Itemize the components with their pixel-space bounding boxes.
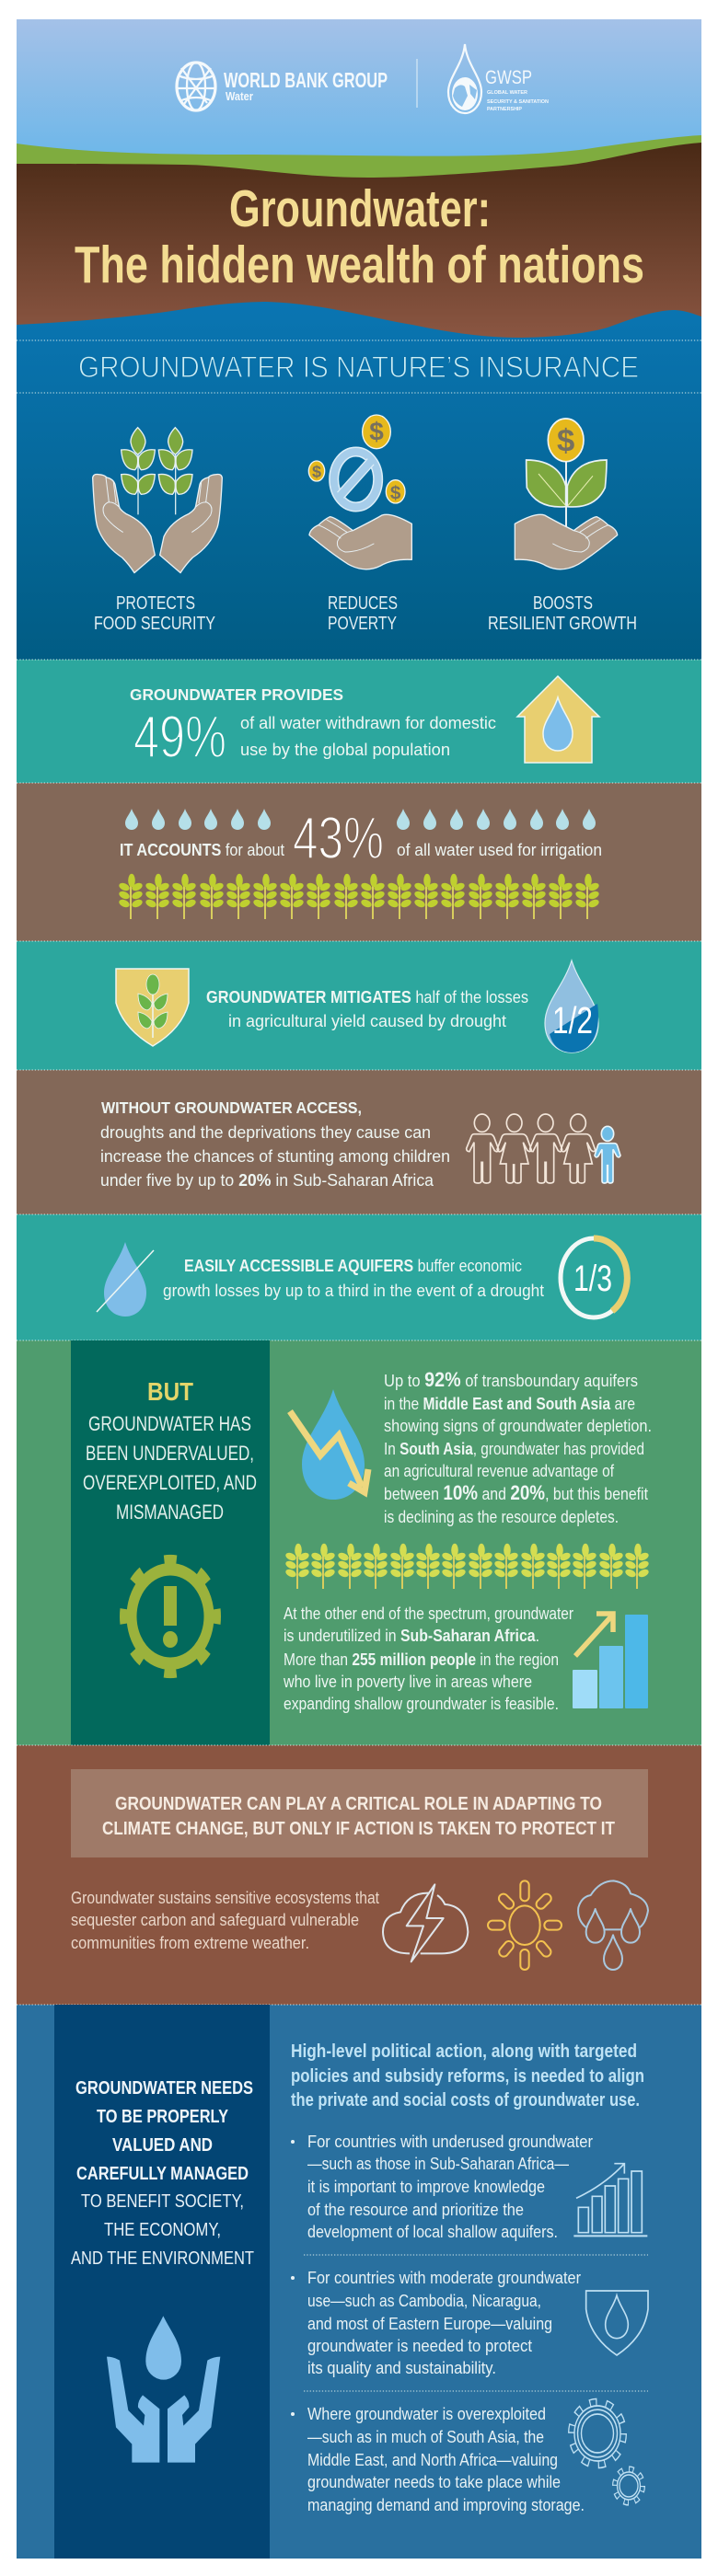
bullet: moderate groundwater: use—such as Cambodia, Nicaragua,: [307, 2291, 541, 2310]
panel: drought yield losses: [17, 941, 701, 1070]
icon: hand growing coin plant: $: [557, 424, 574, 459]
bullet: overexploited groundwater: —such as in much of South Asia, the: [307, 2427, 544, 2446]
sidebar: groundwater needs to be properly valued: GROUNDWATER NEEDS: [75, 2077, 253, 2099]
bullet: moderate groundwater: its quality and sustainability.: [307, 2358, 496, 2377]
sidebar: but groundwater has been undervalued: MISMANAGED: [116, 1501, 224, 1524]
heading: high-level political action: the private and social costs of groundwater use.: [291, 2090, 640, 2110]
panel: climate change adaptation: [17, 1745, 701, 2005]
bullet: underused groundwater: —such as those in Sub-Saharan Africa—: [307, 2154, 569, 2173]
text: sensitive ecosystems: sequester carbon and safeguard vulnerable: [71, 1910, 359, 1929]
text: without groundwater access: WITHOUT GROUNDWATER ACCESS,: [101, 1098, 362, 1117]
text: groundwater provides 49%: 49%: [133, 703, 226, 770]
sidebar: but groundwater has been undervalued: GROUNDWATER HAS: [88, 1412, 251, 1435]
logo: World Bank Group: Water: [226, 89, 253, 103]
icon: sun: [488, 1880, 562, 1970]
icon row: wheat: [118, 874, 600, 919]
text: easily accessible aquifers: [163, 1256, 544, 1300]
text: sensitive ecosystems: [71, 1888, 379, 1952]
heading: high-level political action: policies and subsidy reforms, is needed to align: [291, 2066, 644, 2087]
icon: storm cloud: [383, 1884, 468, 1961]
icon: outline gears: [572, 2402, 643, 2502]
text: 43% used for irrigation: IT ACCOUNTS for about: [120, 840, 284, 859]
label: protects food security: PROTECTS: [116, 593, 195, 614]
text: transboundary aquifers depletion: between 10% and 20%, but this benefit: [384, 1481, 648, 1504]
icon row: wheat: [284, 1544, 650, 1589]
text: 43% used for irrigation: of all water used for irrigation: [397, 840, 602, 859]
label: boosts resilient growth: RESILIENT GROWTH: [488, 614, 637, 634]
icon: water drop with slash: [97, 1242, 154, 1317]
sidebar: but groundwater has been undervalued: BEEN UNDERVALUED,: [86, 1442, 254, 1465]
bullet: overexploited groundwater: groundwater needs to take place while: [307, 2472, 561, 2491]
label: boosts resilient growth: BOOSTS: [533, 593, 593, 614]
text: without groundwater access: [100, 1098, 450, 1190]
text: underutilized in Sub-Saharan Africa: who live in poverty live in areas where: [283, 1672, 532, 1691]
sidebar: groundwater needs to be properly valued: [54, 2005, 270, 2559]
icon: gear with exclamation mark: [125, 1561, 215, 1672]
text: transboundary aquifers depletion: [384, 1368, 652, 1526]
sidebar: but groundwater has been undervalued: [71, 1340, 270, 1745]
text: transboundary aquifers depletion: is declining as the resource depletes.: [384, 1507, 619, 1526]
icon: hand with coins and prohibition sign: $: [312, 463, 321, 481]
icon: hand with coins and prohibition sign: [308, 415, 411, 569]
sidebar: groundwater needs to be properly valued: VALUED AND: [112, 2134, 213, 2156]
panel: header landscape: [17, 19, 701, 342]
chart: rising bars with arrow: [573, 1614, 648, 1708]
bullet: underused groundwater: development of local shallow aquifers.: [307, 2222, 558, 2241]
sidebar: but groundwater has been undervalued: BUT: [147, 1377, 193, 1406]
text: groundwater provides 49%: use by the global population: [240, 740, 450, 759]
text: groundwater provides 49%: [130, 685, 496, 770]
text: 43% used for irrigation: 43%: [293, 804, 384, 871]
bullet: overexploited groundwater: Middle East, and North Africa—valuing: [307, 2450, 558, 2469]
panel: aquifers buffer growth losses: [17, 1214, 701, 1340]
sidebar: but groundwater has been undervalued: OVEREXPLOITED, AND: [83, 1471, 257, 1494]
panel: 43 percent irrigation: [17, 783, 701, 941]
callout: critical role in adapting to climate change: GROUNDWATER CAN PLAY A CRITICAL ROLE IN ADAPTING TO: [115, 1793, 602, 1814]
text: groundwater mitigates: [206, 987, 528, 1030]
label: protects food security: [94, 593, 215, 634]
callout: critical role in adapting to climate change: CLIMATE CHANGE, BUT ONLY IF ACTION IS TAKEN TO PROTECT IT: [102, 1818, 615, 1839]
heading: high-level political action: High-level political action, along with targeted: [291, 2041, 637, 2062]
icon: hand with coins and prohibition sign: $: [390, 482, 401, 503]
label: reduces poverty: [328, 593, 398, 634]
logo: GWSP: GLOBAL WATER: [487, 90, 528, 96]
icon: house with water drop: [517, 676, 599, 763]
bullet: underused groundwater: it is important to improve knowledge: [307, 2177, 545, 2196]
bullet: overexploited groundwater: [291, 2404, 585, 2514]
logo: GWSP: [448, 44, 549, 113]
text: underutilized in Sub-Saharan Africa: More than 255 million people in the region: [284, 1650, 559, 1669]
text: underutilized in Sub-Saharan Africa: [283, 1604, 573, 1713]
sidebar: groundwater needs to be properly valued: TO BENEFIT SOCIETY,: [81, 2191, 244, 2212]
label: protects food security: FOOD SECURITY: [94, 614, 215, 634]
bullet: overexploited groundwater: Where groundwater is overexploited: [307, 2404, 546, 2423]
text: groundwater mitigates: GROUNDWATER MITIGATES half of the losses: [206, 987, 528, 1006]
text: transboundary aquifers depletion: showing signs of groundwater depletion.: [384, 1416, 652, 1435]
icon: hand with coins and prohibition sign: $: [369, 418, 384, 446]
icon: hands holding wheat: [93, 428, 222, 573]
sidebar: groundwater needs to be properly valued: TO BE PROPERLY: [97, 2106, 228, 2127]
icon: outline shield with drop: [586, 2291, 648, 2355]
sidebar: groundwater needs to be properly valued: THE ECONOMY,: [104, 2219, 221, 2240]
bullet: underused groundwater: of the resource and prioritize the: [307, 2200, 524, 2219]
bullet: moderate groundwater: and most of Eastern Europe—valuing: [307, 2314, 552, 2333]
logo: GWSP: SECURITY & SANITATION: [487, 99, 549, 105]
panel: undervalued and overexploited: [17, 1340, 701, 1745]
logo: GWSP: GWSP: [485, 67, 532, 88]
bullet: moderate groundwater: [291, 2268, 581, 2377]
icon: adults and stunted child: [467, 1114, 620, 1183]
icon: one third ring: 1/3: [573, 1259, 612, 1299]
text: sensitive ecosystems: communities from extreme weather.: [71, 1933, 309, 1952]
icon: rain cloud: [578, 1880, 648, 1970]
title: [75, 179, 644, 294]
label: reduces poverty: POVERTY: [328, 614, 397, 634]
text: underutilized in Sub-Saharan Africa: is underutilized in Sub-Saharan Africa.: [284, 1626, 539, 1645]
panel: groundwater is nature's insurance: [17, 302, 701, 660]
heading: nature's insurance: GROUNDWATER IS NATURE’S INSURANCE: [78, 351, 639, 384]
text: easily accessible aquifers: EASILY ACCESSIBLE AQUIFERS buffer economic: [184, 1256, 522, 1275]
text: transboundary aquifers depletion: in the Middle East and South Asia are: [384, 1394, 635, 1413]
icon row: water drops: [125, 809, 596, 830]
bullet: overexploited groundwater: managing demand and improving storage.: [307, 2495, 585, 2514]
panel: 49 percent domestic use: [17, 660, 701, 783]
panel: policy action: [17, 2005, 701, 2559]
text: without groundwater access: increase the chances of stunting among children: [100, 1146, 450, 1166]
callout: critical role in adapting to climate change: [71, 1769, 648, 1857]
icon: declining water drop: [290, 1389, 368, 1500]
text: transboundary aquifers depletion: In South Asia, groundwater has provided: [384, 1439, 644, 1458]
logo: World Bank Group: WORLD BANK GROUP: [224, 68, 388, 92]
bullet: underused groundwater: For countries with underused groundwater: [307, 2132, 593, 2151]
icon: half-full drop: [545, 960, 598, 1052]
text: groundwater provides 49%: GROUNDWATER PROVIDES: [130, 685, 343, 704]
label: reduces poverty: REDUCES: [328, 593, 398, 614]
bullet: underused groundwater: [291, 2132, 593, 2241]
text: without groundwater access: droughts and the deprivations they cause can: [100, 1122, 431, 1142]
text: groundwater provides 49%: of all water withdrawn for domestic: [240, 713, 496, 732]
icon: hand growing coin plant: [515, 419, 618, 569]
text: easily accessible aquifers: growth losses by up to a third in the event of a drought: [163, 1281, 544, 1300]
label: boosts resilient growth: [488, 593, 637, 634]
text: groundwater mitigates: in agricultural yield caused by drought: [228, 1011, 506, 1030]
logo: World Bank Group: [177, 63, 388, 110]
heading: high-level political action: [291, 2041, 644, 2110]
icon: shield with wheat: [116, 969, 189, 1046]
text: underutilized in Sub-Saharan Africa: At the other end of the spectrum, groundwater: [284, 1604, 573, 1623]
icon: half-full drop: 1/2: [552, 999, 593, 1041]
sidebar: groundwater needs to be properly valued: AND THE ENVIRONMENT: [71, 2248, 254, 2269]
bullet: moderate groundwater: For countries with moderate groundwater: [307, 2268, 581, 2287]
bullet: moderate groundwater: groundwater is needed to protect: [307, 2336, 532, 2355]
text: transboundary aquifers depletion: Up to 92% of transboundary aquifers: [384, 1368, 638, 1391]
text: transboundary aquifers depletion: an agricultural revenue advantage of: [384, 1461, 615, 1480]
icon: hands protecting a water drop: [107, 2316, 220, 2463]
text: underutilized in Sub-Saharan Africa: expanding shallow groundwater is feasible.: [284, 1694, 559, 1713]
text: sensitive ecosystems: Groundwater sustains sensitive ecosystems that: [71, 1888, 379, 1907]
title: Groundwater:: [229, 179, 491, 238]
sidebar: groundwater needs to be properly valued: CAREFULLY MANAGED: [76, 2163, 249, 2184]
icon: one third ring: [561, 1238, 627, 1317]
text: without groundwater access: under five by up to 20% in Sub-Saharan Africa: [100, 1170, 434, 1190]
icon: outline bar chart: [573, 2164, 647, 2236]
panel: child stunting: [17, 1070, 701, 1214]
logo: GWSP: PARTNERSHIP: [487, 107, 522, 112]
text: 43% used for irrigation: [120, 804, 602, 871]
